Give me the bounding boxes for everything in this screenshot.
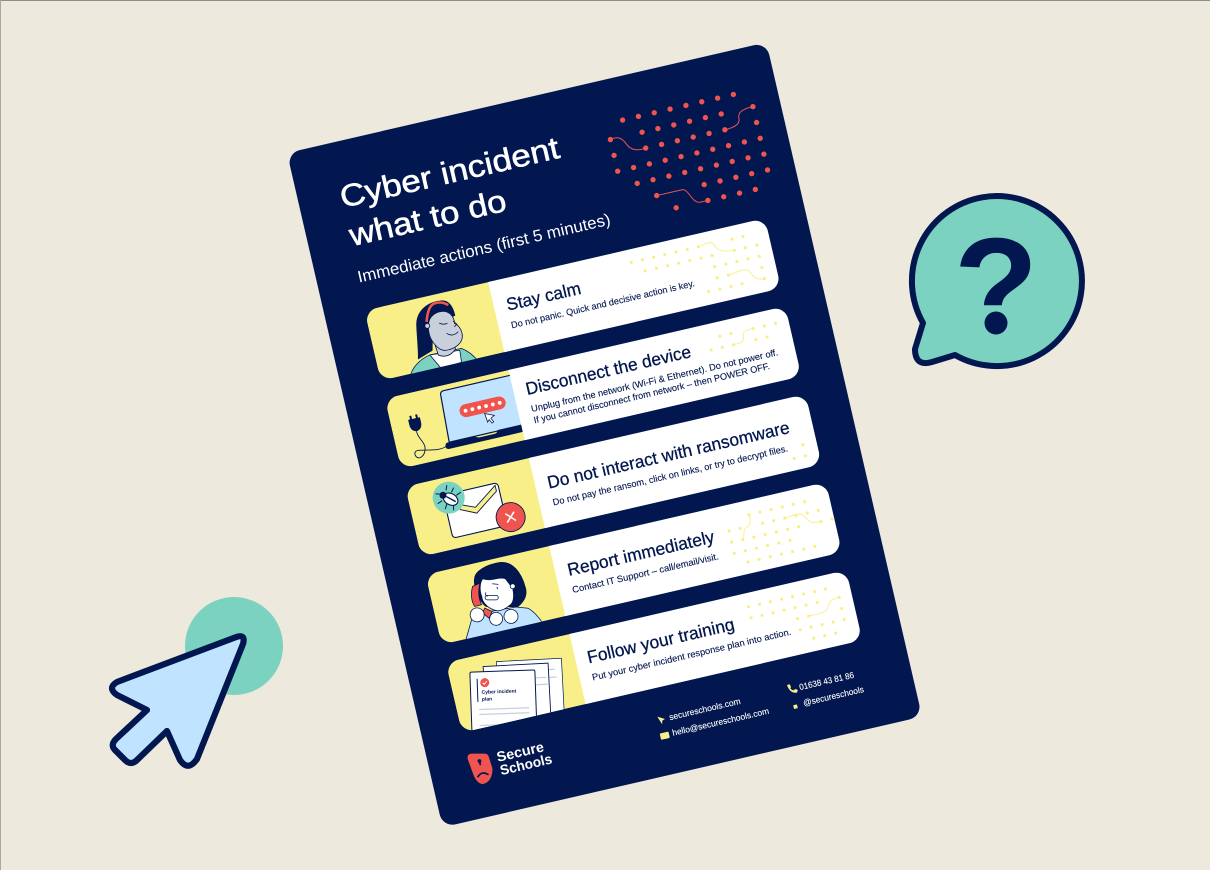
- illustration: cyber incident plan documents: Cyber incident: [481, 689, 517, 696]
- decorative yellow dots: [707, 321, 780, 352]
- icon: cursor: [657, 715, 666, 725]
- card 3: do not interact with ransomware: [405, 394, 822, 557]
- illustration: worried woman on phone: [466, 562, 542, 639]
- illustration: cyber incident plan documents: [469, 658, 564, 730]
- heading: Stay calm: [504, 278, 583, 315]
- illustration: calm woman: [410, 300, 476, 374]
- white panel: [508, 306, 801, 440]
- icon: speech bubble with question mark: [912, 196, 1082, 366]
- poster: [287, 42, 922, 827]
- description: Do not panic. Quick and decisive action is key.: [510, 278, 696, 330]
- heading: Disconnect the device: [524, 341, 693, 399]
- card 5: follow your training: [448, 572, 860, 730]
- heading: Follow your training: [585, 614, 736, 667]
- footer contacts: [655, 668, 865, 741]
- card 4: report immediately: [425, 482, 843, 648]
- icon: teal circle behind cursor: [185, 597, 283, 695]
- phone number: 01638 43 81 86: [798, 670, 855, 692]
- illustration: cyber incident plan documents: plan: [482, 696, 492, 703]
- title: what to do: [345, 183, 510, 253]
- illustration: envelope with bug and cross: [432, 482, 526, 538]
- email: hello@secureschools.com: [671, 706, 770, 738]
- logo wordmark: [495, 737, 554, 778]
- title: [336, 130, 572, 253]
- white panel: [488, 218, 781, 352]
- icon: mail: [660, 732, 670, 740]
- decorative yellow dots: [790, 443, 807, 460]
- icon: social: [793, 704, 798, 709]
- heading: Report immediately: [565, 527, 716, 580]
- title: Cyber incident: [336, 130, 563, 215]
- white panel: [529, 394, 822, 528]
- description: Unplug from the network (Wi-Fi & Ethernet). Do not power off.: [530, 347, 779, 414]
- description: If you cannot disconnect from network – then POWER OFF.: [533, 361, 771, 425]
- white panel: [549, 482, 842, 616]
- illustration: laptop with password prompt: [440, 374, 523, 449]
- logo wordmark: Schools: [498, 751, 554, 778]
- decorative yellow dots: [629, 232, 766, 309]
- decorative yellow dots: [725, 495, 839, 566]
- description: Contact IT Support – call/email/visit.: [571, 551, 720, 595]
- heading: Do not interact with ransomware: [545, 417, 791, 492]
- logo: [467, 736, 554, 786]
- description: Do not pay the ransom, click on links, or try to decrypt files.: [552, 443, 789, 507]
- icon: large cursor arrow: [112, 636, 244, 766]
- card 1: stay calm: [364, 218, 782, 385]
- icon: logo mark: [467, 750, 495, 786]
- decorative yellow dots: [747, 585, 849, 653]
- white panel: [569, 570, 862, 704]
- social handle: @secureschools: [802, 684, 865, 708]
- illustration: plug and cord: [408, 414, 446, 458]
- icon: phone: [787, 683, 798, 694]
- website: secureschools.com: [668, 696, 741, 722]
- logo wordmark: Secure: [495, 738, 546, 765]
- description: Put your cyber incident response plan into action.: [591, 627, 792, 682]
- subtitle: Immediate actions (first 5 minutes): [356, 211, 612, 287]
- icon: speech bubble with question mark: ?: [954, 210, 1038, 364]
- card 2: disconnect the device: [385, 306, 801, 469]
- decorative red dot network: [604, 88, 774, 222]
